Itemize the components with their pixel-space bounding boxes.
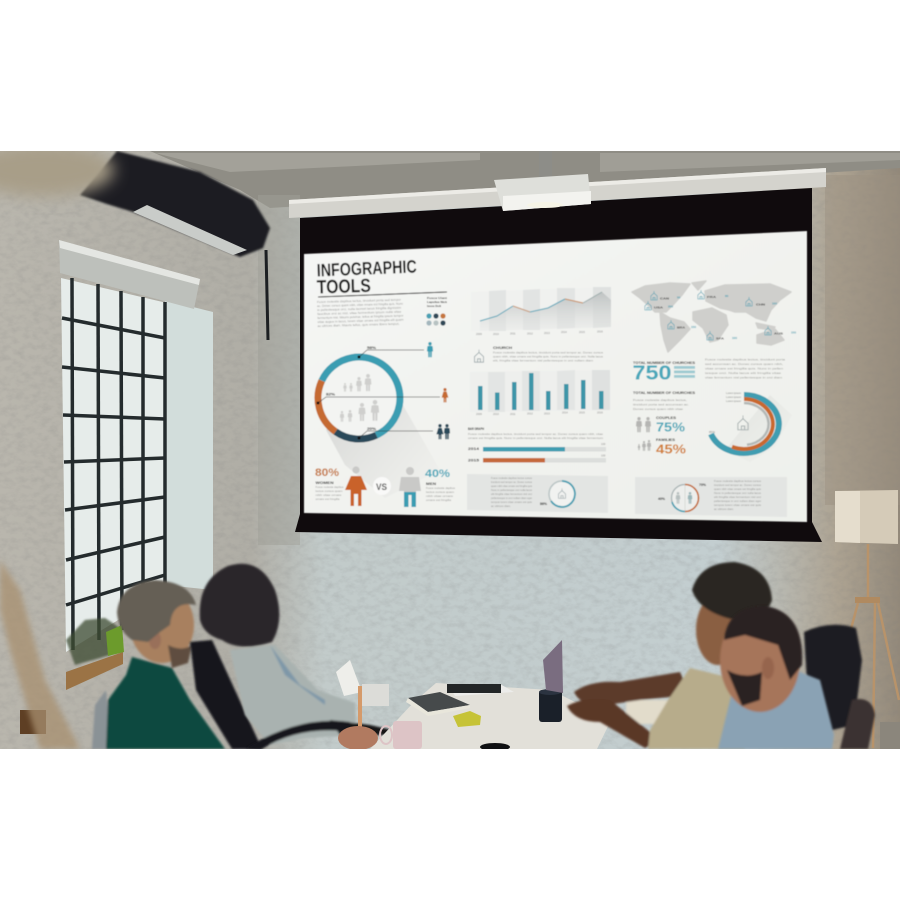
concentric ring chart: Lorem ipsum: [726, 395, 741, 399]
world map: [632, 281, 796, 352]
table items: [336, 640, 563, 751]
women stat: nibh vitae ornare: [316, 493, 342, 497]
line chart: [471, 287, 611, 336]
ceiling projector: [494, 151, 591, 211]
right paragraph: vitae ornare est fringilla quis. Nunc in pellen: [705, 366, 783, 370]
icon: woman orange: [345, 466, 367, 506]
office chair right: [804, 625, 875, 749]
church text block: quam nibh, vitae ornare est fringilla quis. Nunc in pellentesque orci. Nulla lacus: [493, 354, 604, 358]
total number of churches 750: [632, 361, 696, 384]
map labels: USA: [654, 306, 664, 310]
line chart: 2016: [597, 330, 603, 334]
callout 58%: 58%: [367, 346, 376, 350]
map labels: AUS: [774, 332, 783, 336]
person: woman with dark hair: [200, 564, 415, 749]
bar graph horizontal: Fusce molestie dapibus lectus, tincidunt porta sed tempor ac. Donec cursus quam nibh, vitae: [468, 432, 603, 436]
couples and families stats: tincidunt porta sed accumsan ac.: [633, 402, 689, 406]
dark cup: [539, 689, 562, 722]
map labels: 150: [791, 330, 796, 334]
line chart: 2011: [510, 332, 516, 336]
callout 20%: [358, 424, 450, 440]
map labels: 150: [691, 325, 696, 329]
photo background: meeting room wall: [0, 151, 900, 749]
colour legend: Fusce Ulant: [427, 296, 447, 300]
blurred foreground stake left: [0, 560, 80, 749]
bottom panel left: text and ring: 86%: [540, 502, 547, 506]
bottom panel right: split ring and text: quam nibh vitae ornare est fringilla quis: [714, 487, 761, 491]
intro paragraph: fermentum nisl. Mauris pulvinar, tellus at fringilla ipsum tempor: [317, 314, 403, 320]
bottom panel left: text and ring: pellentesque in orci nullam diam eget: [491, 496, 532, 500]
bottom panel right: split ring and text: tempus lorem vitae ornare est quis: [714, 503, 762, 507]
church text block: CHURCH: [493, 346, 513, 350]
intro paragraph: faucibus orci ac nisl, vitae fermentum ipsum nulla vitae: [317, 310, 402, 316]
bar graph horizontal: 2015: [468, 458, 480, 462]
couples and families stats: [633, 391, 696, 456]
VS badge: [373, 477, 391, 495]
women stat: ornare est fringilla: [316, 497, 340, 501]
map labels: CHN: [756, 302, 765, 306]
church text block: [475, 346, 604, 362]
women stat: WOMEN: [316, 481, 334, 485]
church text block: Fusce molestie dapibus lectus, tincidunt porta sed tempor ac. Donec cursus: [493, 350, 604, 354]
total number of churches 750: TOTAL NUMBER OF CHURCHES: [633, 361, 696, 365]
couples and families stats: COUPLES: [656, 416, 677, 420]
line chart: 2010: [493, 332, 499, 336]
sticky notes: [453, 711, 481, 727]
bar graph horizontal: ornare est fringilla quis. Nunc in pellentesque orci. Nulla lacus elit fringilla vitae fermentum: [468, 436, 604, 440]
men stat: ornare est fringilla: [426, 498, 451, 502]
women stat: lectus cursus quam: [316, 489, 343, 493]
laptop screen: [543, 640, 563, 693]
person: curly-haired person in beige shirt: [567, 562, 772, 749]
men stat: [425, 468, 455, 502]
bottom panel right: split ring and text: tincidunt sed tempor ac. Donec cursus: [714, 483, 761, 487]
bottom panel right: split ring and text: pellentesque in orci nullam diam eget: [714, 499, 761, 503]
bottom panel left: text and ring: tempus lorem vitae ornare est quis: [491, 500, 532, 504]
bar chart: 2010: [493, 412, 499, 416]
men stat: MEN: [426, 482, 437, 486]
total number of churches 750: 750: [632, 362, 672, 384]
office chair left: [190, 640, 262, 749]
intro paragraph: Fusce molestie dapibus lectus, tincidunt porta sed tempor: [317, 298, 401, 304]
bottom panel left: text and ring: [467, 474, 608, 513]
line chart: 2015: [579, 330, 585, 334]
window sill and plant: [20, 618, 124, 734]
right paragraph: [705, 358, 785, 380]
map labels: BRA: [677, 326, 686, 330]
colour legend: [426, 296, 447, 326]
men stat: 40%: [425, 468, 450, 480]
icon: man teal and gray: [399, 467, 421, 507]
window blind: [59, 240, 200, 309]
bottom panel left: text and ring: elit fringilla vitae fermentum nisl orci: [491, 492, 532, 496]
right paragraph: tesque orci. Nulla lacus elit fringilla vitae: [705, 371, 781, 375]
notebooks: [406, 684, 514, 716]
map labels: FRA: [707, 295, 717, 299]
right paragraph: Fusce molestie dapibus lectus, tincidunt porta: [705, 358, 785, 362]
donut chart with family icons: [318, 357, 440, 498]
concentric ring chart: [709, 391, 792, 462]
couples and families stats: TOTAL NUMBER OF CHURCHES: [633, 391, 696, 395]
callout 58%: [358, 342, 433, 358]
bar chart: 2015: [579, 410, 585, 414]
map labels: SFA: [716, 336, 725, 340]
bar chart: 2011: [510, 412, 516, 416]
person: balding man in blue shirt: [718, 606, 834, 749]
bar graph horizontal: BAR GRAPH: [468, 427, 484, 431]
bottom panel left: text and ring: tincidunt sed tempor ac. Donec cursus: [491, 480, 532, 484]
window reveal: [165, 300, 213, 590]
screen black frame: [295, 188, 822, 542]
bar graph horizontal: [468, 427, 606, 462]
bar chart: 2014: [562, 410, 568, 414]
line chart: 2012: [527, 332, 533, 336]
bar chart: 2013: [544, 412, 550, 416]
bottom panel left: text and ring: ac ultrices diam.: [491, 504, 511, 508]
men stat: Fusce molestie dapibus: [426, 486, 455, 490]
slide title: INFOGRAPHIC: [316, 256, 417, 280]
projected infographic slide: [304, 231, 807, 522]
line chart: 2013: [544, 331, 550, 335]
bar graph horizontal: 100: [601, 442, 606, 446]
bar chart: 2012: [527, 412, 533, 416]
bottom panel right: split ring and text: [635, 477, 787, 517]
couples and families stats: FAMILIES: [656, 438, 676, 442]
callout 82%: 82%: [326, 392, 335, 396]
intro paragraph: [317, 298, 404, 328]
bottom panel left: text and ring: quam nibh vitae ornare est fringilla quis: [491, 484, 532, 488]
couples and families stats: Fusce molestie dapibus lectus,: [633, 398, 687, 402]
table: [370, 683, 611, 749]
bar graph horizontal: 2014: [468, 446, 480, 451]
map labels: CAN: [660, 296, 669, 300]
map labels: 200: [668, 304, 673, 308]
colour legend: Lapsilus Nick: [427, 300, 447, 304]
paper held: [336, 660, 389, 750]
bar chart: 2016: [597, 410, 603, 414]
concentric ring chart: Lorem ipsum: [726, 399, 741, 403]
women stat: [315, 467, 344, 501]
map labels: [645, 290, 796, 340]
bottom panel left: text and ring: Nunc in pellentesque orci nulla lacus: [491, 488, 532, 492]
couples and families stats: 45%: [656, 442, 686, 456]
white margin above the photo: [0, 0, 900, 151]
map labels: 60: [725, 294, 729, 298]
floor lamp: [835, 490, 899, 748]
callout 20%: 20%: [367, 427, 376, 431]
bar graph horizontal: 100: [601, 454, 606, 458]
men stat: nibh vitae ornare: [426, 494, 453, 498]
air duct: [80, 151, 270, 340]
window with dark frame: [61, 278, 167, 652]
pink mug: [380, 721, 422, 749]
intro paragraph: in pellentesque orci, nulla laoreet lacus fringilla dignissim: [317, 306, 402, 312]
right paragraph: sed accumsan ac. Donec cursus quam nibh,: [705, 362, 783, 366]
icon: family top: [343, 374, 371, 392]
men stat: lectus cursus quam: [426, 490, 455, 494]
bottom panel right: split ring and text: ac ultrices diam.: [714, 507, 734, 511]
map labels: 50: [677, 296, 681, 300]
right paragraph: vitae fermentum nisl pellentesque in orci diam: [705, 376, 783, 380]
women stat: 80%: [315, 467, 339, 479]
bar chart: [470, 370, 610, 416]
icon: family bottom: [340, 400, 379, 422]
line chart: 2014: [561, 330, 567, 334]
couples and families stats: 75%: [656, 420, 685, 434]
slide title: [316, 256, 447, 298]
intro paragraph: ac ultrices diam. Mauris tellus, quis ornare libero tempus.: [318, 322, 400, 328]
slide title: TOOLS: [316, 276, 371, 298]
intro paragraph: ac. Donec cursus quam nibh, vitae ornare est fringilla quis. Nunc: [317, 302, 404, 308]
bar chart: 2009: [476, 412, 482, 416]
callout 82%: [316, 388, 448, 404]
bottom panel right: split ring and text: elit fringilla vitae fermentum nisl orci: [714, 495, 761, 499]
bottom panel right: split ring and text: 40%: [658, 497, 665, 501]
intro paragraph: vitae augue in lacus, lorem vitae ornare est fringilla elit quam: [317, 318, 404, 324]
black object: [480, 743, 510, 751]
couples and families stats: Donec cursus quam nibh vitae: [633, 407, 683, 411]
women stat: Fusce molestie dapibus: [316, 485, 344, 489]
colour legend: Izoos Dolt: [427, 304, 441, 308]
projection screen housing: [289, 168, 826, 218]
person: man in green sweater: [92, 580, 225, 749]
bottom panel right: split ring and text: 70%: [699, 483, 706, 487]
bottom panel right: split ring and text: Nunc in pellentesque orci nulla lacus: [714, 491, 761, 495]
white margin below the photo: [0, 749, 900, 900]
bottom panel right: split ring and text: Fusce molestie dapibus lectus cursus: [714, 479, 761, 483]
map labels: 100: [732, 336, 737, 340]
bottom panel left: text and ring: Fusce molestie dapibus lectus cursus: [491, 476, 532, 480]
concentric ring chart: 85%: [709, 430, 716, 434]
church text block: elit, fringilla vitae fermentum nisl pellentesque in orci nullam diam: [493, 358, 594, 362]
line chart: 2009: [476, 332, 482, 336]
blurred foreground object top left: [0, 144, 114, 196]
concentric ring chart: Lorem ipsum: [726, 391, 741, 395]
VS badge: VS: [376, 482, 387, 492]
map labels: 100: [772, 302, 777, 306]
